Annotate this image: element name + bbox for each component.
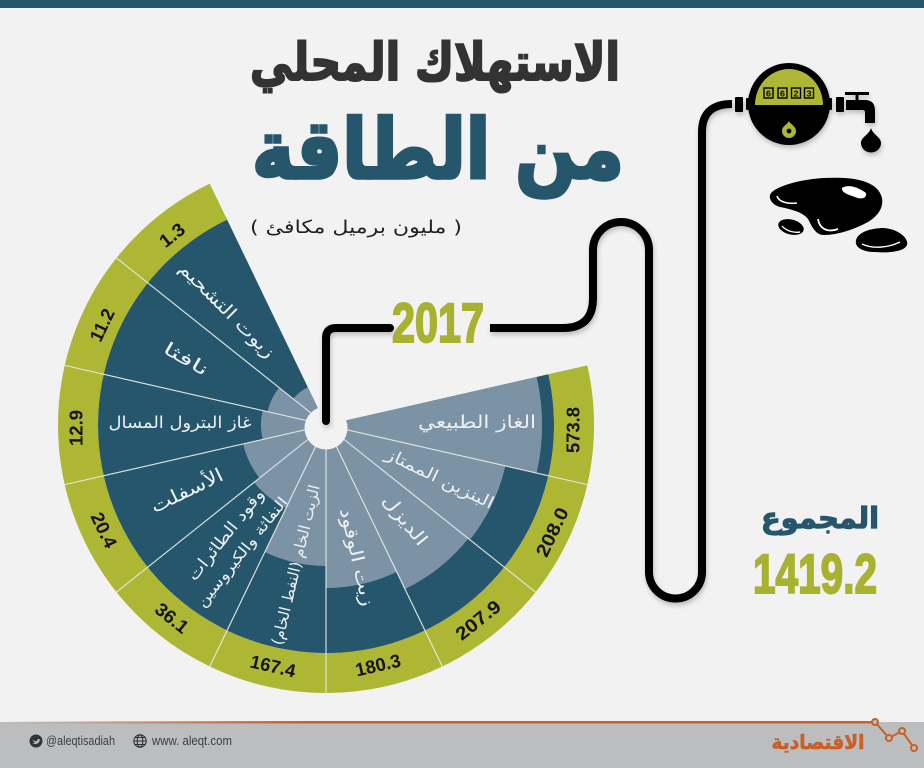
wedge: natural gas (326, 377, 542, 473)
value labels (66, 218, 584, 682)
label: fuel oil: زيت الوقود (335, 506, 378, 608)
value: crude: 167.4 (248, 651, 298, 682)
label: gasoline: البنزين الممتاز (381, 444, 497, 513)
label: LPG: غاز البترول المسال (108, 413, 252, 433)
counter digits: 6 (780, 90, 785, 100)
icon: oil puddle (770, 178, 907, 252)
counter digits: 6 (766, 90, 771, 100)
subtitle: ( مليون برميل مكافئ ) (250, 217, 462, 238)
counter digits: 3 (806, 90, 812, 100)
icon: water meter and tap (735, 63, 881, 152)
segment labels (108, 258, 536, 647)
center hub (304, 406, 348, 450)
wedge: gasoline (326, 425, 505, 540)
value: gasoline: 208.0 (531, 504, 573, 560)
twitter handle: @aleqtisadiah (46, 733, 115, 748)
year label: 2017 (392, 291, 484, 354)
total label: المجموع (761, 501, 879, 535)
wedge: diesel (326, 425, 468, 589)
meter key (782, 121, 796, 138)
counter digits (764, 88, 814, 100)
dark sector base (98, 220, 554, 653)
icon: globe (134, 735, 146, 747)
wedge: naphtha (268, 388, 326, 425)
label: natural gas: الغاز الطبيعي (418, 412, 536, 433)
pipe (326, 104, 732, 598)
value: lube oils: 1.3 (155, 218, 189, 252)
publication logo: الاقتصادية (772, 730, 864, 754)
value: LPG: 12.9 (66, 410, 86, 446)
label: naphtha: نافثا (159, 338, 212, 381)
total value: 1419.2 (753, 542, 877, 605)
wedge: crude (265, 425, 326, 566)
website: www. aleqt.com (151, 733, 232, 748)
label: jet fuel and kerosene (183, 485, 291, 611)
wedge: fuel oil (326, 425, 397, 588)
value: fuel oil: 180.3 (353, 650, 403, 680)
footer (0, 719, 924, 768)
counter digits: 2 (793, 90, 799, 100)
wedge: asphalt (243, 425, 326, 478)
logo network line (872, 719, 917, 751)
label: crude oil: الزيت الخام (النفط الخام) (268, 483, 324, 647)
tap (846, 100, 875, 123)
title line 1: الاستهلاك المحلي (250, 33, 620, 93)
value: jet fuel: 36.1 (151, 598, 193, 638)
icon: twitter (30, 734, 42, 748)
value: naphtha: 11.2 (85, 305, 119, 345)
label: asphalt: الأسفلت (147, 463, 227, 518)
value: diesel: 207.9 (451, 596, 505, 644)
label: jet fuel and kerosene: النفاثة والكيروسين (193, 493, 291, 611)
value: asphalt: 20.4 (87, 509, 122, 552)
light wedges proportional to values (243, 377, 542, 589)
label: diesel: الديزل (378, 490, 432, 550)
oil drop (861, 128, 881, 152)
title (250, 33, 624, 238)
top bar (0, 0, 924, 8)
footer bar (0, 722, 924, 768)
radial chart (65, 202, 587, 693)
wedge: jet fuel (254, 425, 326, 508)
meter body (748, 63, 830, 145)
meter connectors (735, 97, 743, 112)
wedge: LPG (261, 410, 326, 440)
wedge: lube oils (293, 387, 326, 425)
title line 2: من الطاقة (252, 103, 624, 198)
value: natural gas: 573.8 (562, 407, 584, 453)
meter dial (755, 69, 823, 105)
total (753, 501, 879, 605)
outer green ring (78, 202, 574, 673)
label: jet fuel and kerosene: وقود الطائرات (183, 485, 269, 585)
label: lube oils: زيوت التشحيم (174, 258, 279, 363)
